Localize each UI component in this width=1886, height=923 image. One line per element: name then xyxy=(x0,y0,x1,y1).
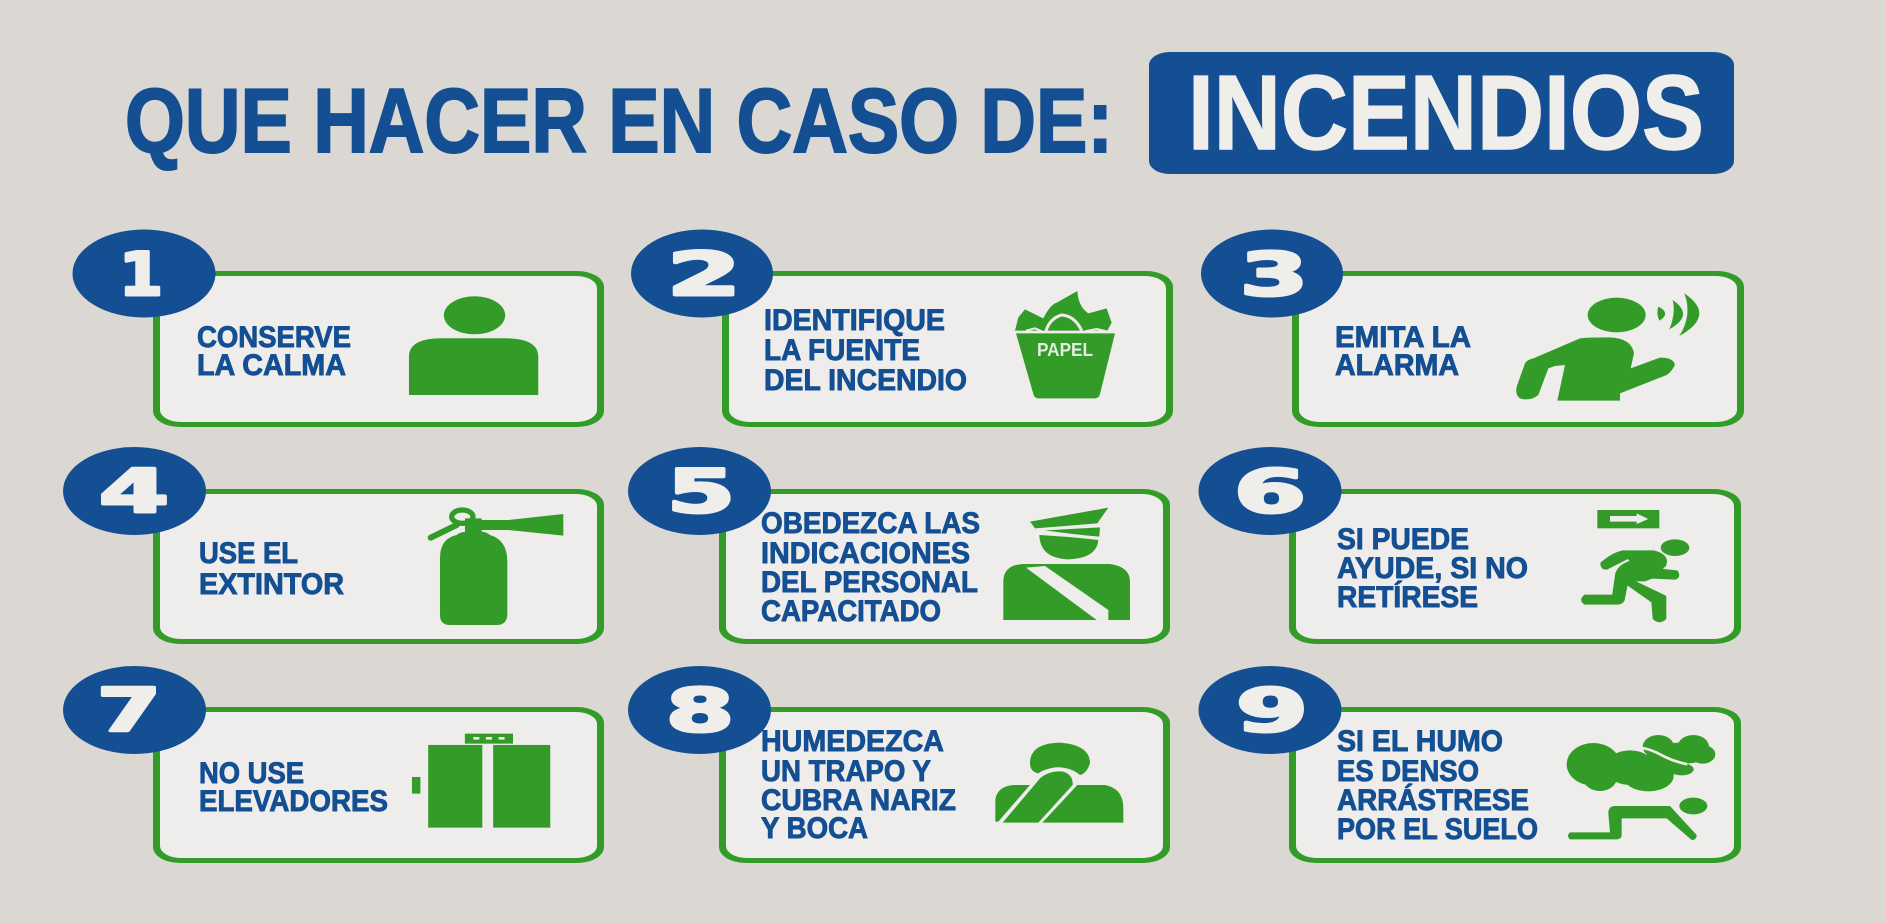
text: step 5: INDICACIONES xyxy=(761,537,970,570)
text: step 7 xyxy=(199,757,388,818)
text: step 2: LA FUENTE xyxy=(764,334,920,367)
icon: person crawling under smoke xyxy=(1567,735,1715,840)
panel: step 4 xyxy=(63,447,604,644)
text: step 8: UN TRAPO Y xyxy=(761,755,931,788)
panel: step 9 xyxy=(1198,666,1741,863)
text: step 5: CAPACITADO xyxy=(761,595,941,628)
panel: step 1: 1 xyxy=(119,240,163,310)
text: step 7: NO USE xyxy=(199,757,304,790)
text: step 6: SI PUEDE xyxy=(1337,523,1469,556)
title badge: incendios: INCENDIOS xyxy=(1188,54,1704,172)
panel: step 2 xyxy=(631,230,1173,427)
panel: step 6 xyxy=(1198,447,1741,644)
icon: person covering nose xyxy=(995,743,1123,823)
text: step 6: RETÍRESE xyxy=(1337,580,1478,614)
text: step 9: SI EL HUMO xyxy=(1337,725,1503,758)
text: step 9: ARRÁSTRESE xyxy=(1337,783,1529,817)
text: step 9: ES DENSO xyxy=(1337,755,1479,788)
panel: step 5 xyxy=(628,447,1170,644)
panel: step 8 xyxy=(628,666,1170,863)
text: step 6: AYUDE, SI NO xyxy=(1337,552,1528,585)
icon: person shouting alarm xyxy=(1516,293,1699,401)
icon: burning paper bin xyxy=(1015,291,1115,398)
panel: step 7 xyxy=(63,666,604,863)
text: step 9 xyxy=(1337,725,1538,846)
text: step 3 xyxy=(1335,321,1471,382)
panel: step 4: 4 xyxy=(99,457,169,527)
icon: fire extinguisher xyxy=(431,510,563,625)
panel: step 6: 6 xyxy=(1234,457,1306,527)
text: step 4: USE EL xyxy=(199,537,298,570)
icon: burning paper bin: PAPEL xyxy=(1037,340,1093,360)
text: step 7: ELEVADORES xyxy=(199,785,388,818)
text: step 8: HUMEDEZCA xyxy=(761,725,944,758)
icon: person running to exit xyxy=(1582,510,1689,621)
panel: step 8: 8 xyxy=(666,676,734,746)
text: step 8: Y BOCA xyxy=(761,812,868,845)
panel: step 5: 5 xyxy=(667,457,735,527)
text: step 4: EXTINTOR xyxy=(199,568,344,601)
text: step 1: CONSERVE xyxy=(197,321,351,354)
text: step 4 xyxy=(199,537,344,601)
text: step 1 xyxy=(197,321,351,382)
panel: step 1 xyxy=(72,230,604,427)
title: QUE HACER EN CASO DE: xyxy=(125,71,1113,172)
panel: step 9: 9 xyxy=(1236,676,1308,746)
panel: step 3 xyxy=(1201,230,1744,427)
panel: step 3: 3 xyxy=(1240,240,1308,310)
panel: step 2: 2 xyxy=(667,240,741,310)
text: step 6 xyxy=(1337,523,1528,614)
icon: uniformed officer xyxy=(1003,508,1130,620)
text: step 3: EMITA LA xyxy=(1335,321,1471,354)
text: step 2: DEL INCENDIO xyxy=(764,364,967,397)
text: step 5 xyxy=(761,507,980,628)
text: step 3: ALARMA xyxy=(1335,349,1459,382)
icon: person calm xyxy=(409,296,538,395)
text: step 2 xyxy=(764,304,967,397)
panel: step 7: 7 xyxy=(97,676,161,746)
text: step 2: IDENTIFIQUE xyxy=(764,304,945,337)
text: step 8 xyxy=(761,725,956,845)
text: step 1: LA CALMA xyxy=(197,349,346,382)
icon: elevator xyxy=(412,734,550,828)
text: step 5: DEL PERSONAL xyxy=(761,566,978,599)
text: step 5: OBEDEZCA LAS xyxy=(761,507,980,540)
text: step 8: CUBRA NARIZ xyxy=(761,784,956,817)
text: step 9: POR EL SUELO xyxy=(1337,813,1538,846)
